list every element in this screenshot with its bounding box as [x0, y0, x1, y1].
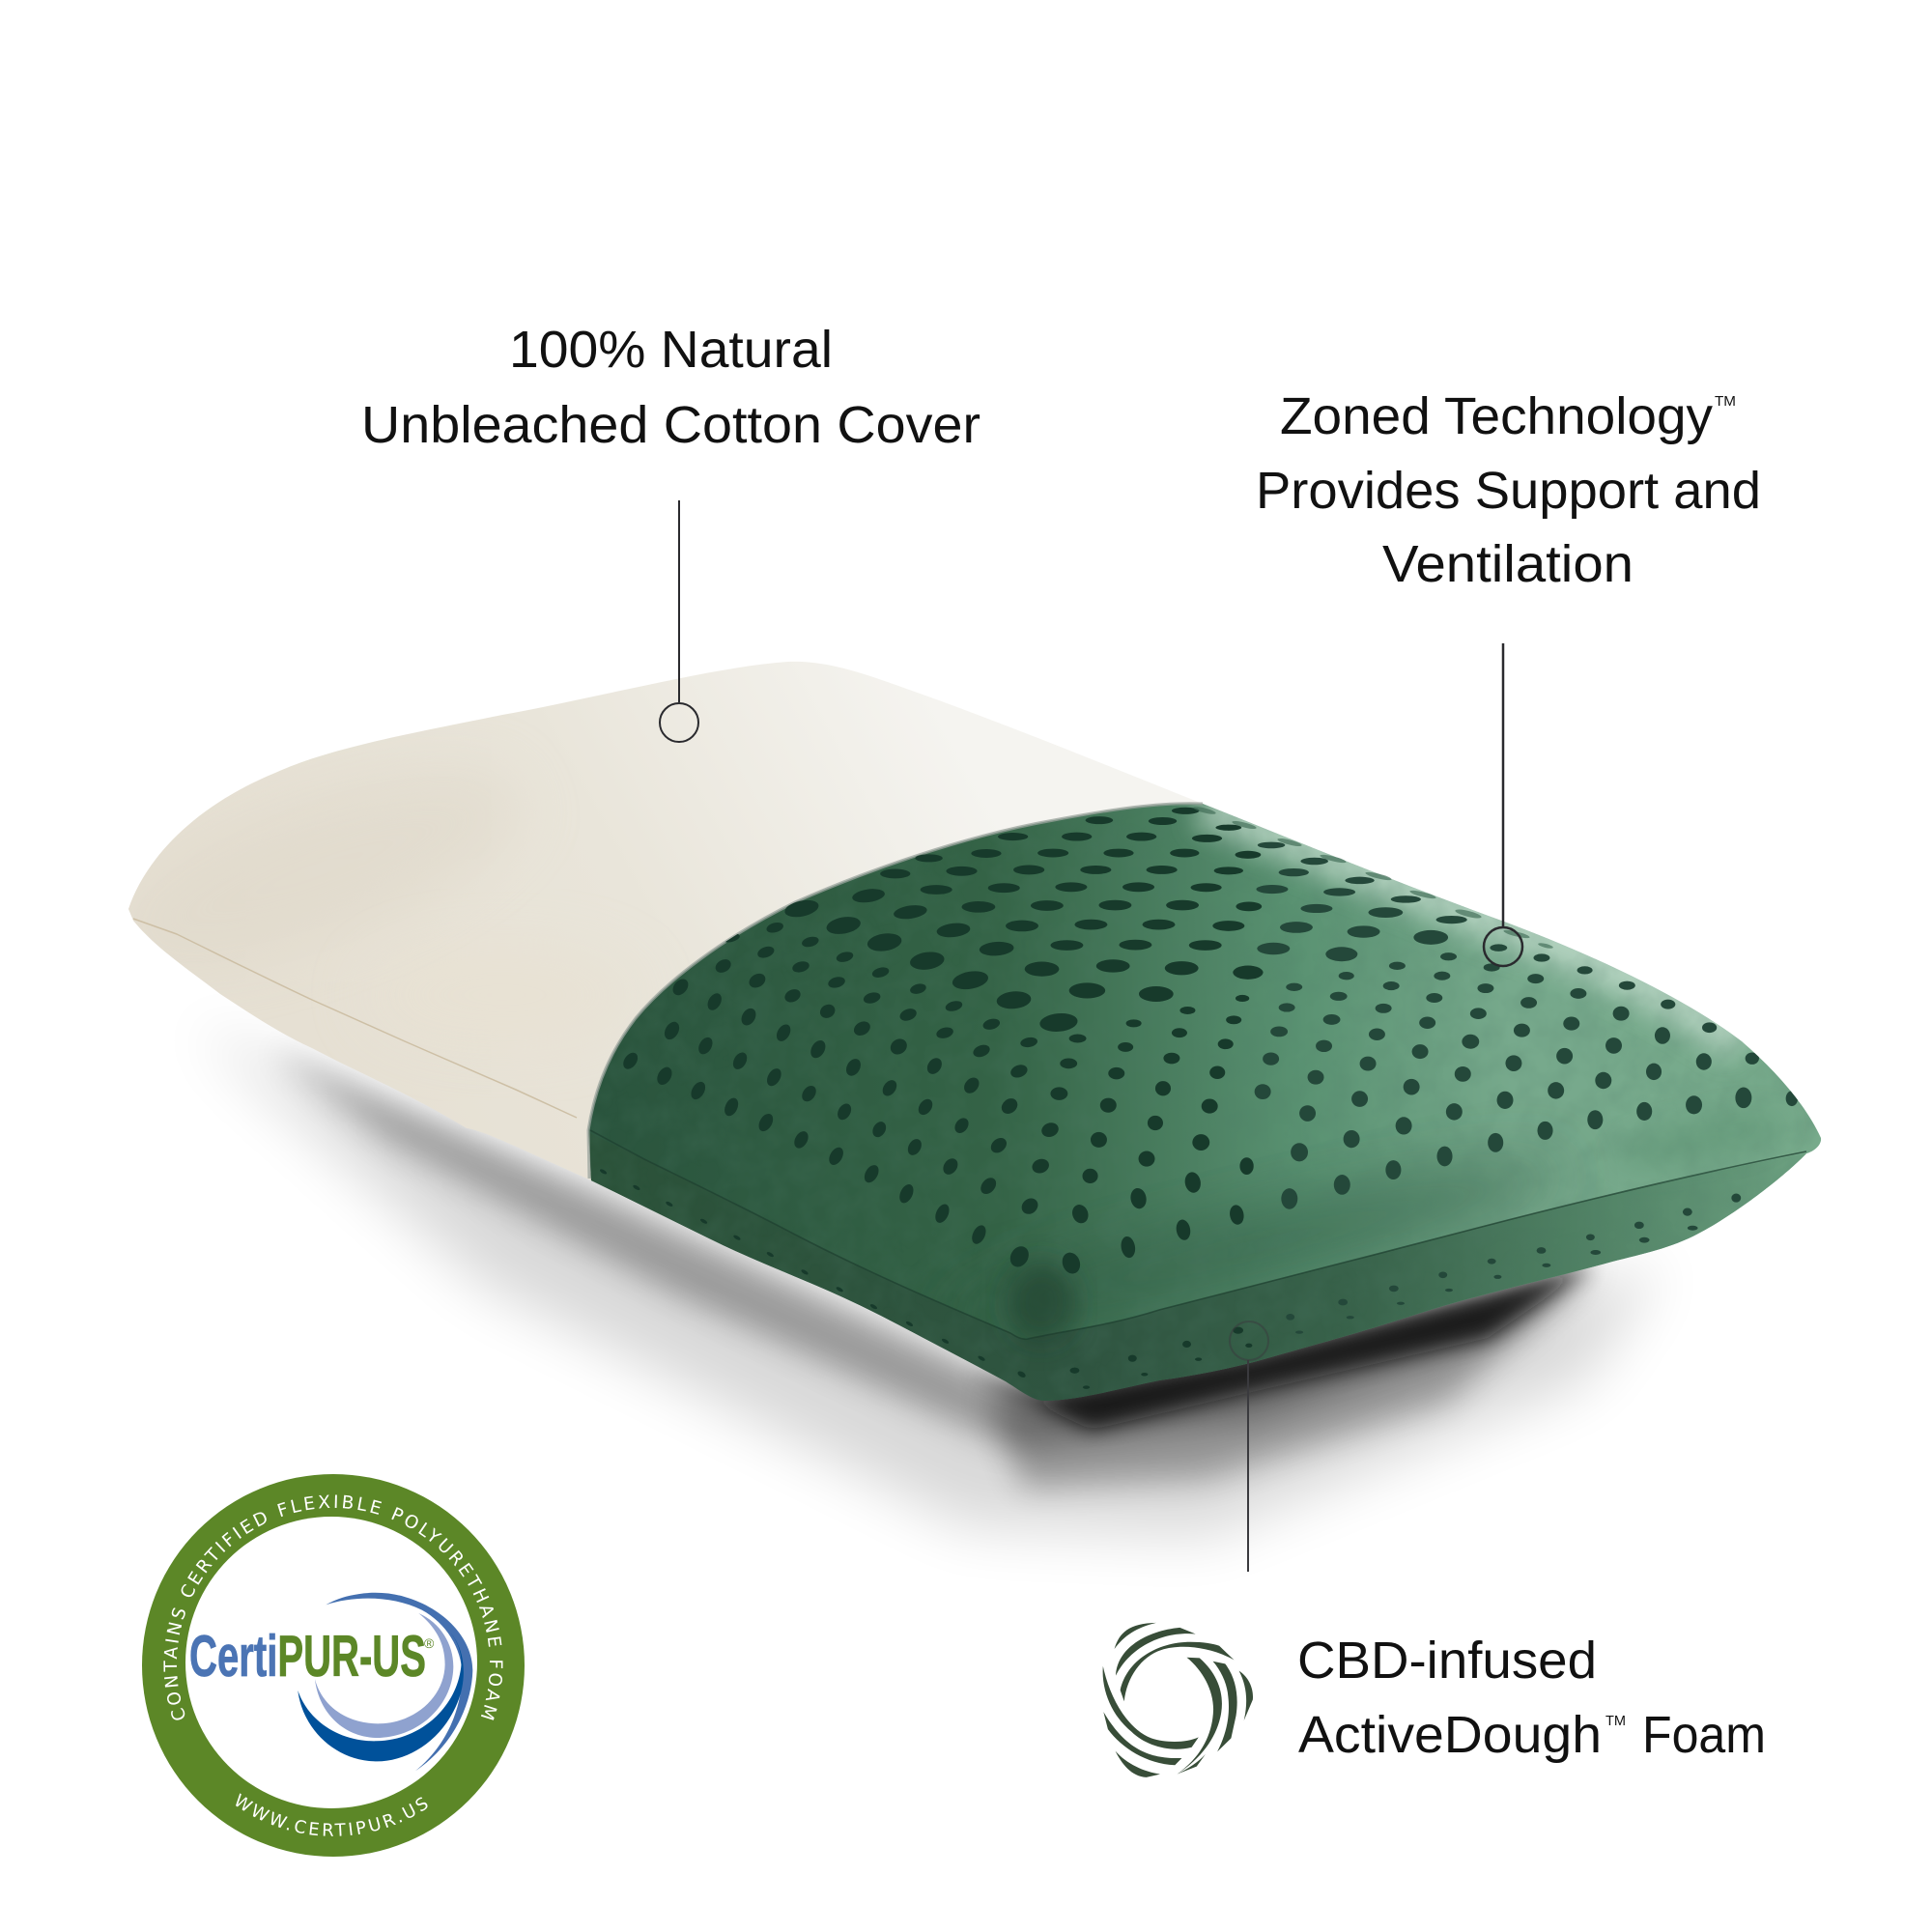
leader line: zoned technology — [1484, 643, 1522, 966]
callout: cbd-infused activedough foam: CBD-infused — [1297, 1632, 1597, 1690]
icon: activedough woven ring — [1103, 1623, 1253, 1777]
badge wordmark: CertiPUR-US — [189, 1624, 426, 1689]
badge swooshes — [298, 1593, 472, 1771]
callout: zoned technology — [1256, 387, 1761, 593]
callout: 100% natural unbleached cotton cover — [361, 321, 980, 454]
badge: CertiPUR-US seal — [142, 1474, 525, 1857]
pillow: green foam core — [580, 792, 1835, 1420]
badge arc text: bottom: WWW.CERTIPUR.US — [236, 1793, 427, 1836]
registered mark: ® — [424, 1635, 435, 1651]
callout: zoned technology: Zoned Technology — [1280, 387, 1713, 445]
callout: 100% natural unbleached cotton cover: Unbleached Cotton Cover — [361, 396, 980, 454]
foam ventilation holes, right section — [1255, 842, 1798, 1334]
callout: cbd-infused activedough foam — [1297, 1632, 1766, 1764]
callout: cbd-infused activedough foam: TM — [1605, 1713, 1626, 1729]
pillow: cotton cover — [96, 662, 1203, 1180]
badge inner disc — [185, 1517, 477, 1808]
callout: zoned technology: TM — [1715, 393, 1736, 410]
leader line: cotton cover — [660, 500, 698, 742]
callout: zoned technology: Ventilation — [1382, 535, 1634, 593]
foam holes fading over the top-right edge — [1193, 806, 1553, 950]
callout: cbd-infused activedough foam: Foam — [1642, 1706, 1766, 1764]
badge arc text: top: CONTAINS CERTIFIED FLEXIBLE POLYURETHANE FOAM — [163, 1495, 502, 1720]
leader line: activedough foam — [1230, 1321, 1268, 1572]
foam ventilation holes, left section — [599, 808, 1264, 1389]
underside panel below the seam — [580, 1128, 1826, 1420]
callout: 100% natural unbleached cotton cover: 100% Natural — [509, 321, 833, 379]
pillow shadow on the ground — [193, 1024, 1662, 1536]
callout: zoned technology: Provides Support and — [1256, 462, 1761, 520]
badge ring — [142, 1474, 525, 1857]
callout: cbd-infused activedough foam: ActiveDough — [1298, 1706, 1602, 1764]
